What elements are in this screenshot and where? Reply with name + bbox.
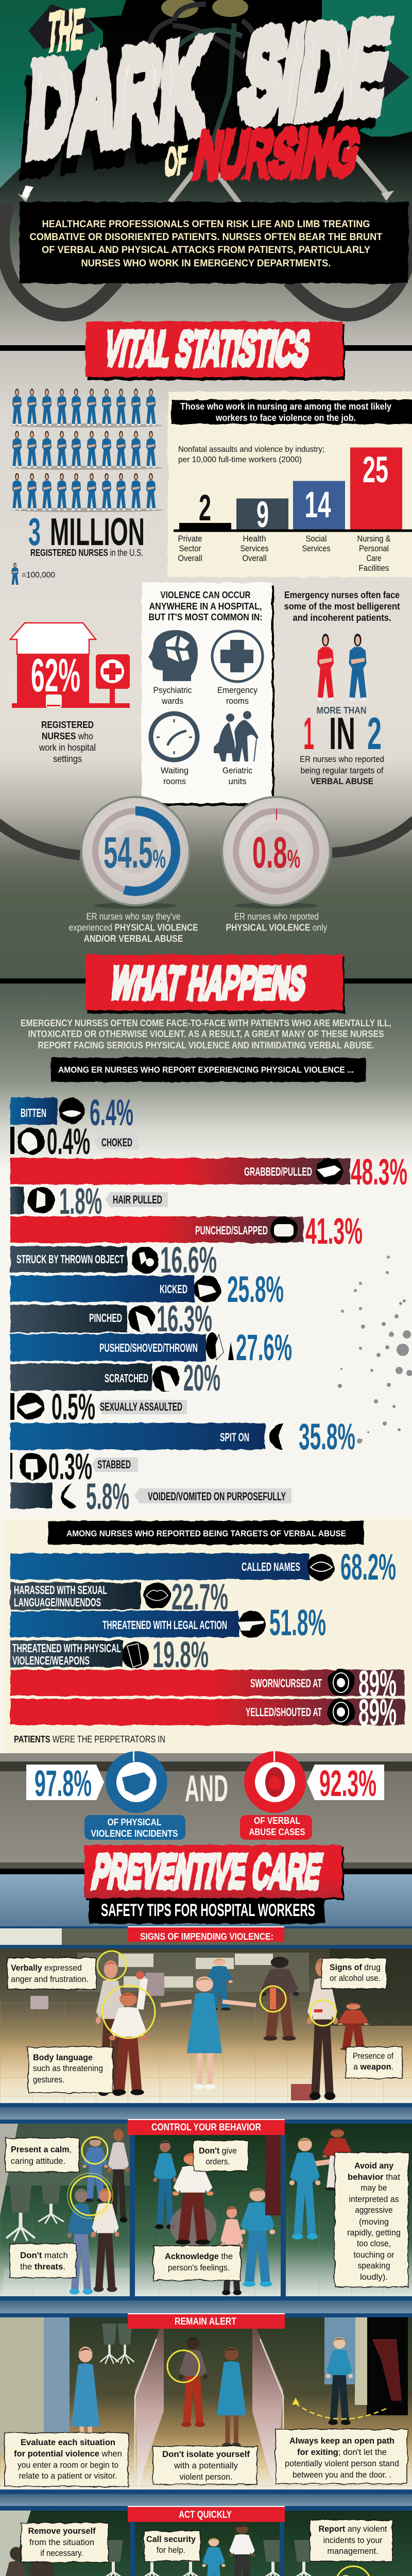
stat: 3 million registered nurses: MILLION: [50, 510, 145, 553]
label: emergency rooms: [217, 685, 258, 706]
callout: acknowledge feelings: Acknowledge the: [165, 2251, 233, 2261]
figure: nurse on phone: [202, 2538, 226, 2576]
callout: remove yourself: from the situation: [29, 2537, 94, 2547]
chart caption: Nonfatal assaults and violence by industry;: [178, 445, 324, 454]
row: grabbed / pulled: [10, 1152, 407, 1193]
row: sworn / cursed at: SWORN/CURSED AT: [250, 1676, 322, 1690]
stat: more than 1 in 2: being regular targets of: [301, 766, 384, 775]
label: waiting rooms: Waiting: [161, 766, 188, 775]
label: psychiatric wards: wards: [161, 696, 183, 706]
dial caption: physical violence and/or verbal abuse: AND/OR VERBAL ABUSE: [83, 934, 183, 944]
chart caption: per 10,000 full-time workers (2000): [178, 455, 302, 464]
panel heading: ANYWHERE IN A HOSPITAL,: [149, 601, 262, 612]
figure: man with tie behind: [108, 2129, 129, 2223]
figure: dark man: [260, 1957, 299, 2041]
callout: signs of drug use: Signs of drug: [330, 1962, 381, 1972]
figure: nurse with stethoscope: [240, 2188, 275, 2287]
figure: nurse in dress: [217, 2347, 246, 2448]
panel: where violence occurs: [142, 583, 274, 806]
row: stabbed: [10, 1447, 138, 1487]
scene: control your behavior: [0, 2103, 412, 2296]
row: harassed with sexual language: HARASSED WITH SEXUAL: [14, 1583, 107, 1597]
row: spit on: [10, 1417, 355, 1458]
stat: 3 million registered nurses: 3: [28, 510, 41, 553]
coat on stand: [265, 2124, 281, 2215]
text block: emergency nurses face belligerent patients: [284, 590, 400, 623]
pictogram: 30 registered nurses: [10, 388, 163, 512]
legend: one nurse equals 100,000: =100,000: [22, 571, 55, 580]
callout: present a calm attitude: [6, 2138, 79, 2172]
figure: agitated man: [322, 2129, 352, 2191]
row: scratched: SCRATCHED: [105, 1371, 148, 1385]
stat: more than 1 in 2: 2: [367, 708, 382, 759]
intro text block: OF VERBAL AND PHYSICAL ATTACKS FROM PATIENTS, PARTICULARLY: [42, 245, 370, 256]
row: threatened with physical violence: 19.8%: [152, 1635, 209, 1675]
callout: don't match the threats: Don't match: [20, 2250, 68, 2260]
callout: evaluate each situation: [5, 2433, 128, 2486]
waiting chairs: [101, 2540, 316, 2576]
scene: remain alert: [0, 2296, 412, 2489]
dark room with door: [324, 2317, 408, 2415]
row: spit on: SPIT ON: [220, 1430, 249, 1444]
tab: control your behavior: [128, 2119, 285, 2135]
bar chart: Services: [240, 544, 269, 553]
text: and: AND: [185, 1768, 228, 1809]
row: hair pulled: 1.8%: [59, 1181, 102, 1222]
figure: center nurse: [161, 1976, 256, 2090]
callout: evaluate each situation: relate to a patient or visitor.: [19, 2471, 117, 2481]
bar chart: Facilities: [358, 563, 389, 573]
panel heading: BUT IT'S MOST COMMON IN:: [148, 612, 263, 622]
stat: more than 1 in 2: [300, 705, 384, 786]
callout: don't isolate yourself: Don't isolate yourself: [162, 2449, 250, 2459]
bar chart: Care: [367, 553, 381, 563]
callout: verbally expressed: Verbally expressed: [11, 1963, 82, 1973]
dial caption: physical violence only: ER nurses who reported: [234, 911, 319, 922]
callout: body language: gestures.: [33, 2075, 64, 2084]
callout: body language: Body language: [33, 2053, 93, 2062]
scene: signs of impending violence: [0, 1926, 412, 2103]
row: threatened with physical violence: VIOLENCE/WEAPONS: [12, 1654, 90, 1667]
stat: more than 1 in 2: VERBAL ABUSE: [311, 776, 373, 786]
title: The Dark Side of Nursing: DARK: [18, 31, 203, 200]
heading banner: What Happens: [0, 955, 412, 1013]
callout: remove yourself: if necessary.: [40, 2548, 83, 2558]
label: emergency rooms: rooms: [226, 696, 249, 706]
stat: 3 million registered nurses: REGISTERED NURSES in the U.S.: [30, 548, 143, 558]
row: kicked: [10, 1269, 284, 1310]
label: geriatric units: [222, 766, 252, 786]
highlight ring: [336, 2566, 371, 2576]
row: scratched: [10, 1358, 220, 1399]
row: choked: CHOKED: [101, 1136, 132, 1149]
bar chart: physical violence: [10, 1093, 407, 1517]
stat: 3 million registered nurses: [28, 510, 145, 558]
callout: remove yourself: [21, 2523, 108, 2562]
chart heading: verbal abuse: AMONG NURSES WHO REPORTED BEING TARGETS OF VERBAL ABUSE: [66, 1529, 346, 1538]
tab: control your behavior: CONTROL YOUR BEHAVIOR: [151, 2122, 261, 2133]
text block: what happens intro: [21, 1018, 391, 1050]
text: registered nurses in hospital settings: NURSES who: [42, 731, 93, 741]
callout: report violent incidents: incidents to your: [323, 2535, 383, 2545]
stethoscope tubes: [0, 820, 412, 855]
bar chart: 14: [305, 485, 331, 526]
dial: 54.5% physical violence and/or verbal abuse: 54.5%: [104, 828, 166, 877]
text: registered nurses in hospital settings: settings: [53, 754, 82, 764]
figure: man in wheelchair: [170, 2153, 216, 2246]
text block: emergency nurses face belligerent patients: Emergency nurses often face: [284, 590, 400, 600]
text block: emergency nurses face belligerent patients: some of the most belligerent: [284, 601, 400, 612]
chart heading: verbal abuse: [48, 1521, 364, 1545]
label: waiting rooms: [161, 766, 188, 786]
panel: nonfatal assaults by industry: [168, 392, 412, 577]
row: grabbed / pulled: GRABBED/PULLED: [244, 1165, 312, 1178]
callout: avoid aggressive behavior: [335, 2153, 408, 2287]
callout: present a calm attitude: caring attitude.: [11, 2156, 65, 2166]
row: choked: [10, 1122, 139, 1162]
bar chart: verbal abuse: [10, 1547, 405, 1733]
callout: avoid aggressive behavior: loudly).: [360, 2272, 388, 2282]
row: pinched: [10, 1299, 212, 1340]
stat: 92.3% of verbal abuse cases: [240, 1751, 384, 1840]
callout: don't match the threats: the threats.: [20, 2262, 65, 2272]
chart heading: physical violence: [51, 1058, 366, 1082]
stat: more than 1 in 2: MORE THAN: [316, 705, 367, 716]
bar chart: Social: [306, 534, 327, 544]
dial caption: physical violence and/or verbal abuse: ER nurses who say they've: [87, 911, 180, 922]
row: hair pulled: [10, 1181, 168, 1222]
row: sworn / cursed at: [10, 1664, 405, 1704]
highlight circles: [97, 1951, 336, 2038]
row: yelled / shouted at: YELLED/SHOUTED AT: [246, 1705, 322, 1719]
tab: remain alert: REMAIN ALERT: [175, 2316, 236, 2327]
callout: don't isolate yourself: [153, 2446, 257, 2484]
subheading: safety tips: [89, 1900, 324, 1924]
bar chart: 25: [363, 450, 388, 490]
splatter decoration: [338, 1256, 412, 1444]
callout: acknowledge feelings: [153, 2246, 241, 2280]
figure: nurse evaluating: [72, 2347, 99, 2465]
arrow: exit path: [292, 2398, 386, 2419]
dial caption: physical violence only: [226, 911, 328, 933]
row: pinched: PINCHED: [89, 1311, 122, 1325]
figure: pointing man: [289, 2138, 352, 2240]
row: sexually assaulted: [10, 1387, 187, 1428]
callout: don't give orders: [193, 2141, 248, 2171]
row: called names: CALLED NAMES: [242, 1560, 300, 1573]
figures: two nurses: [332, 2575, 381, 2576]
figure: crouching woman: [338, 2003, 369, 2050]
text: registered nurses in hospital settings: work in hospital: [39, 742, 96, 753]
callout: avoid aggressive behavior: interpreted as: [349, 2194, 399, 2204]
bar chart: 9: [256, 495, 269, 535]
row: scratched: 20%: [183, 1358, 220, 1399]
row: punched / slapped: [10, 1211, 363, 1252]
icon: psychiatric head: [148, 630, 198, 681]
callout: don't isolate yourself: violent person.: [179, 2472, 233, 2482]
row: voided / vomited: [10, 1477, 291, 1517]
figures: dark threatening men: [3, 2531, 55, 2576]
callout: report violent incidents: management.: [328, 2546, 378, 2556]
callout: avoid aggressive behavior: rapidly, getting: [347, 2228, 401, 2238]
row: spit on: 35.8%: [299, 1417, 355, 1458]
row: voided / vomited: 5.8%: [86, 1477, 129, 1517]
callout: avoid aggressive behavior: touching or: [353, 2250, 394, 2260]
icon: elderly couple: [214, 711, 259, 761]
callout: avoid aggressive behavior: too close,: [357, 2239, 391, 2248]
figure: nurse behind: [206, 1959, 233, 2010]
callout: present a calm attitude: Present a calm,: [11, 2144, 72, 2155]
callout: body language: such as threatening: [33, 2063, 103, 2073]
callout: most likely workers: Those who work in nursing are among the most likely: [180, 401, 391, 412]
figure: nurse behind wheelchair: [153, 2141, 177, 2229]
bar chart: Sector: [179, 544, 201, 553]
callout: verbally expressed: [8, 1958, 96, 1989]
stat: more than 1 in 2: ER nurses who reported: [300, 754, 384, 764]
bar chart: Services: [302, 544, 331, 553]
icon: hospital 62%: 62%: [31, 650, 80, 702]
figure: security guard: [229, 2524, 255, 2576]
tab: signs of impending violence: SIGNS OF IMPENDING VIOLENCE:: [140, 1931, 273, 1942]
callout: avoid aggressive behavior: speaking: [357, 2261, 390, 2270]
callout: evaluate each situation: for potential violence when: [14, 2449, 122, 2459]
callout: presence of a weapon: [346, 2047, 402, 2078]
highlight ring: [167, 2350, 199, 2382]
bar chart: Nursing &: [357, 534, 391, 544]
callout: remove yourself: Remove yourself: [28, 2526, 96, 2536]
row: harassed with sexual language: [10, 1577, 228, 1618]
icon: emergency cross: [212, 631, 263, 682]
callout: report violent incidents: Report any violent: [318, 2524, 387, 2534]
stat: 92.3% of verbal abuse cases: ABUSE CASES: [249, 1827, 305, 1837]
text block: emergency nurses face belligerent patients: and incoherent patients.: [293, 613, 391, 623]
title: The Dark Side of Nursing: OF: [164, 138, 188, 185]
tab: remain alert: [128, 2313, 285, 2329]
chairs: [100, 2324, 134, 2364]
callout: avoid aggressive behavior: may be: [360, 2183, 387, 2193]
callout: don't match the threats: [10, 2244, 76, 2278]
callout: presence of a weapon: Presence of: [353, 2051, 393, 2061]
row: choked: 0.4%: [47, 1122, 90, 1162]
callout: signs of drug use: [322, 1958, 386, 1989]
curtains: [135, 2318, 283, 2488]
callout: presence of a weapon: a weapon.: [353, 2062, 393, 2072]
callout: verbally expressed: anger and frustration.: [11, 1974, 89, 1984]
hero illustration: scrubs and stethoscope: [0, 0, 412, 315]
callout: avoid aggressive behavior: behavior that: [348, 2172, 400, 2182]
dial: 0.8% physical violence only: [221, 796, 331, 909]
callout: call security: [144, 2531, 200, 2561]
dial caption: physical violence and/or verbal abuse: experienced PHYSICAL VIOLENCE: [69, 922, 198, 933]
label: waiting rooms: rooms: [163, 776, 186, 786]
row: struck by thrown object: STRUCK BY THROWN OBJECT: [16, 1252, 124, 1266]
row: threatened with physical violence: THREATENED WITH PHYSICAL: [12, 1641, 121, 1655]
left green scrubs: [0, 0, 126, 188]
callout: avoid aggressive behavior: Avoid any: [354, 2161, 394, 2171]
bar chart: [174, 447, 412, 573]
row: pinched: 16.3%: [157, 1299, 212, 1340]
bar chart: 2: [199, 488, 211, 529]
figure: nurse by door: [326, 2337, 353, 2425]
callout: report violent incidents: [310, 2520, 392, 2561]
callout: signs of drug use: or alcohol use.: [330, 1973, 381, 1983]
icon: red and blue nurses: [317, 634, 367, 701]
legend: one nurse equals 100,000: [11, 563, 55, 586]
label: geriatric units: Geriatric: [222, 766, 252, 775]
chairs: [6, 2182, 64, 2241]
stat: more than 1 in 2: 1: [303, 708, 314, 759]
dial: 54.5% physical violence and/or verbal abuse: [80, 796, 191, 909]
icon: clock: [151, 714, 197, 760]
figure: aggressive man: [109, 1971, 147, 2095]
trash cans: [30, 1973, 314, 2100]
callout: avoid aggressive behavior: aggressive: [355, 2205, 392, 2215]
chart caption: [178, 445, 324, 464]
row: harassed with sexual language: 22.7%: [171, 1577, 228, 1618]
row: kicked: 25.8%: [227, 1269, 284, 1310]
row: stabbed: 0.3%: [48, 1447, 92, 1487]
text block: what happens intro: REPORT FACING SERIOUS PHYSICAL VIOLENCE AND INTIMIDATING VERBAL ABUSE.: [38, 1040, 374, 1050]
callout: call security: Call security: [146, 2534, 196, 2544]
callout: evaluate each situation: you enter a room or begin to: [18, 2460, 118, 2470]
stat: 97.8% of physical violence incidents: [26, 1751, 185, 1840]
row: sexually assaulted: SEXUALLY ASSAULTED: [100, 1400, 182, 1413]
tab: act quickly: [128, 2506, 285, 2522]
row: pushed / shoved / thrown: [10, 1328, 292, 1368]
stat: 97.8% of physical violence incidents: VIOLENCE INCIDENTS: [91, 1828, 178, 1839]
intro text block: COMBATIVE OR DISORIENTED PATIENTS. NURSES OFTEN BEAR THE BRUNT: [30, 232, 383, 243]
intro text block: NURSES WHO WORK IN EMERGENCY DEPARTMENTS.: [81, 258, 331, 269]
callout: avoid aggressive behavior: (moving: [359, 2217, 389, 2227]
chart heading: physical violence: AMONG ER NURSES WHO REPORT EXPERIENCING PHYSICAL VIOLENCE ...: [58, 1065, 354, 1075]
row: threatened with legal action: THREATENED WITH LEGAL ACTION: [102, 1618, 227, 1632]
row: bitten: 6.4%: [90, 1093, 133, 1133]
figure: screaming woman: [96, 1960, 126, 2096]
callout: keep an open path: Always keep an open path: [289, 2436, 394, 2446]
label: geriatric units: units: [229, 776, 246, 786]
dial: 0.8% physical violence only: 0.8%: [252, 828, 300, 877]
tab: act quickly: ACT QUICKLY: [179, 2510, 232, 2520]
row: harassed with sexual language: LANGUAGE/INNUENDOS: [14, 1596, 101, 1609]
stat: 92.3% of verbal abuse cases: OF VERBAL: [254, 1816, 300, 1826]
row: stabbed: STABBED: [97, 1458, 131, 1471]
callout: call security: for help.: [157, 2545, 185, 2555]
callout: don't isolate yourself: with a potentially: [174, 2461, 238, 2470]
callout: most likely workers: [171, 400, 412, 424]
figure: angry man: [91, 2189, 119, 2292]
bar chart: Overall: [178, 553, 202, 563]
panel heading: VIOLENCE CAN OCCUR: [161, 590, 250, 600]
row: punched / slapped: 41.3%: [305, 1211, 363, 1252]
row: struck by thrown object: [10, 1240, 217, 1281]
highlight rings: [67, 2137, 113, 2218]
icon: hospital 62%: [10, 623, 130, 708]
callout: most likely workers: workers to face violence on the job.: [215, 413, 356, 423]
row: struck by thrown object: 16.6%: [160, 1240, 217, 1281]
panel dividers: [130, 2135, 286, 2296]
stat: 97.8% of physical violence incidents: 97.8%: [35, 1764, 92, 1804]
bar chart: Overall: [242, 553, 267, 563]
callout: keep an open path: [276, 2429, 407, 2484]
stat: more than 1 in 2: IN: [329, 708, 355, 759]
callout: keep an open path: potentially violent person stand: [285, 2459, 399, 2468]
tab: signs of impending violence: [128, 1926, 284, 1942]
scene: act quickly: [0, 2489, 412, 2576]
row: pushed / shoved / thrown: 27.6%: [236, 1328, 292, 1368]
row: voided / vomited: VOIDED/VOMITED ON PURPOSEFULLY: [148, 1490, 286, 1503]
text: registered nurses in hospital settings: [39, 720, 96, 764]
text: registered nurses in hospital settings: REGISTERED: [41, 720, 94, 730]
row: bitten: BITTEN: [21, 1106, 46, 1120]
row: hair pulled: HAIR PULLED: [113, 1193, 162, 1206]
row: kicked: KICKED: [160, 1282, 187, 1296]
panel heading: [148, 590, 263, 622]
stat: 97.8% of physical violence incidents: OF PHYSICAL: [107, 1817, 162, 1827]
figure: nurse facing man: [67, 2189, 95, 2295]
callout: body language: [28, 2047, 113, 2093]
callout: don't give orders: orders.: [206, 2157, 230, 2166]
row: threatened with legal action: 51.8%: [269, 1603, 326, 1643]
callout: evaluate each situation: Evaluate each situation: [21, 2437, 115, 2447]
figure: man with weapon: [307, 1958, 338, 2100]
callout: keep an open path: for exiting; don't let the: [297, 2447, 387, 2457]
bar chart: Health: [243, 534, 266, 544]
label: emergency rooms: Emergency: [217, 685, 258, 695]
intro text block: [20, 202, 408, 283]
figure: child: [220, 2207, 244, 2295]
callout: acknowledge feelings: person's feelings.: [168, 2263, 230, 2273]
panel dividers: [130, 2522, 284, 2576]
row: sexually assaulted: 0.5%: [52, 1387, 95, 1428]
label: psychiatric wards: [153, 685, 192, 706]
row: called names: [10, 1547, 396, 1588]
dial caption: physical violence only: PHYSICAL VIOLENCE only: [226, 922, 328, 933]
row: threatened with legal action: [10, 1603, 326, 1643]
right green scrubs: [322, 0, 412, 137]
row: yelled / shouted at: [10, 1692, 405, 1733]
intro text block: HEALTHCARE PROFESSIONALS OFTEN RISK LIFE AND LIMB TREATING: [42, 219, 370, 230]
callout: don't give orders: Don't give: [199, 2146, 237, 2156]
figure: man in red pants: [179, 2337, 208, 2427]
row: punched / slapped: PUNCHED/SLAPPED: [195, 1224, 268, 1237]
bar chart: Private: [178, 534, 202, 544]
callout: keep an open path: between you and the door. .: [293, 2470, 391, 2480]
figure: calm nurse with clipboard: [82, 2138, 108, 2202]
row: bitten: [10, 1093, 133, 1133]
figure: patient seen from behind: [206, 2575, 286, 2576]
row: pushed / shoved / thrown: PUSHED/SHOVED/THROWN: [99, 1341, 198, 1354]
bar chart: Personal: [359, 544, 389, 553]
text: patients were the perpetrators: PATIENTS WERE THE PERPETRATORS IN: [14, 1734, 165, 1744]
row: threatened with physical violence: [10, 1635, 209, 1675]
dial caption: physical violence and/or verbal abuse: [69, 911, 198, 944]
label: psychiatric wards: Psychiatric: [153, 685, 192, 695]
